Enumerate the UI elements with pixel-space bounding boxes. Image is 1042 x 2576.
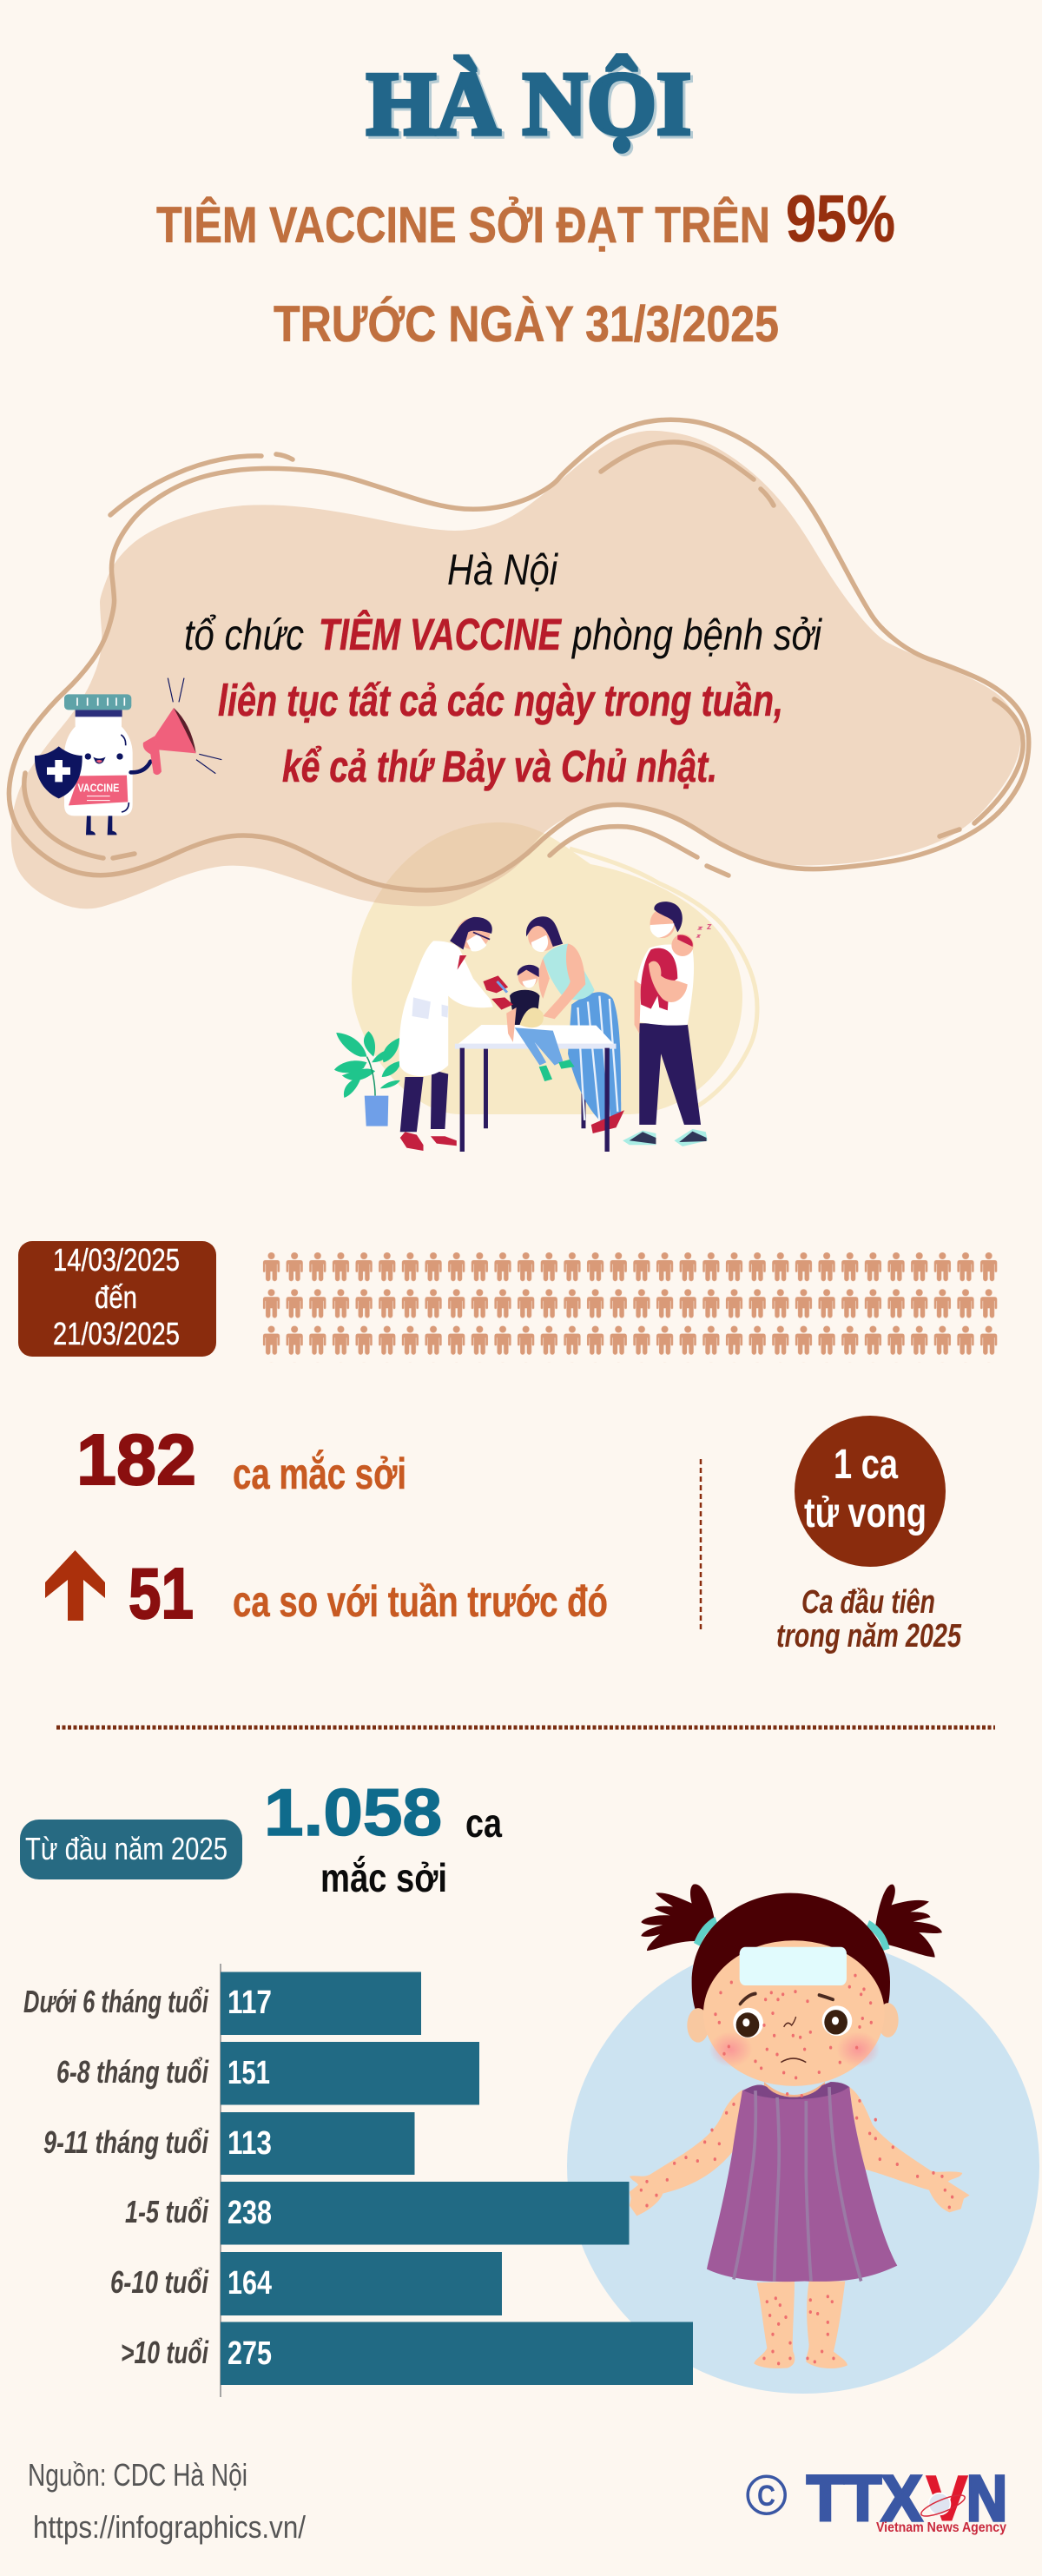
stat: 1.058 cases: 1.058 [264,1776,442,1850]
logo: TTXVN: TTX [807,2462,922,2534]
bar: over 10 years: 275 [228,2335,272,2372]
callout: 1 death [795,1416,946,1567]
logo: TTXVN: C [757,2480,775,2513]
logo: TTXVN [748,2462,1007,2535]
bar: 1-5 years: 1-5 tuổi [125,2194,209,2229]
yellow backdrop behind family [352,822,757,1114]
stat: 51 more cases [129,1553,608,1634]
subtitle [156,182,895,353]
stat: 182 cases: 182 [76,1419,196,1500]
title: HÀ NỘI [366,54,691,154]
stat: 182 cases: ca mắc sởi [233,1450,406,1498]
stat: 51 more cases: 51 [129,1553,194,1634]
logo: TTXVN: Vietnam News Agency [876,2520,1006,2535]
table [455,1025,616,1152]
caption: first death: trong năm 2025 [776,1618,962,1655]
caption: first death: Ca đầu tiên [801,1584,935,1621]
bar: under 6 months [23,1972,421,2035]
source text: https://infographics.vn/ [33,2509,306,2545]
bar: 6-10 years: 164 [228,2265,272,2302]
bar: 6-10 years: 6-10 tuổi [110,2264,209,2300]
text block: message [184,545,823,791]
bar: 6-8 months: 151 [228,2055,270,2091]
subtitle: TIÊM VACCINE SỞI ĐẠT TRÊN [156,197,770,254]
source text: Nguồn: CDC Hà Nội [28,2457,247,2493]
bar: under 6 months: 117 [228,1985,272,2021]
stat: 1.058 cases: mắc sởi [320,1855,447,1900]
panel: message blob [7,417,1032,908]
title: HÀ NỘI [369,56,694,156]
illustration: family at vaccination [334,902,711,1152]
date badge: 21/03/2025 [53,1316,180,1351]
subtitle: TRƯỚC NGÀY 31/3/2025 [274,296,779,353]
icon array: people pictogram rows [260,1252,1000,1363]
logo: TTXVN: N [966,2462,1007,2534]
backdrop circle behind child [567,1939,1039,2394]
bar: 9-11 months [43,2112,415,2175]
stat: 1.058 cases [264,1776,502,1900]
text block: message: Hà Nội [447,545,559,594]
bar: 6-8 months [56,2042,479,2105]
bar: over 10 years [121,2322,693,2385]
icon: potted plant [334,1031,400,1126]
text block: message: kể cả thứ Bảy và Chủ nhật. [282,742,717,791]
bar: over 10 years: >10 tuổi [121,2335,209,2370]
bar: 1-5 years: 238 [228,2195,272,2231]
date badge: đến [95,1279,137,1315]
source text [28,2457,306,2545]
bar: 1-5 years [125,2182,629,2244]
pill: since start of 2025: Từ đầu năm 2025 [25,1831,228,1866]
father holding baby [623,902,711,1146]
bar: 6-10 years [110,2252,502,2315]
text block: message: phòng bệnh sởi [570,611,823,659]
stat: 51 more cases: ca so với tuần trước đó [233,1577,608,1626]
date badge [18,1241,216,1357]
arrow: increase [45,1550,105,1621]
icon: vaccine bottle with megaphone: VACCINE [77,783,119,795]
text block: message: TIÊM VACCINE [319,609,563,659]
callout: 1 death: tử vong [804,1490,927,1536]
mother [526,916,624,1133]
stat: 182 cases [76,1419,406,1500]
text block: message: tổ chức [184,611,304,659]
logo: TTXVN: V [926,2462,968,2534]
pill: since start of 2025 [20,1820,242,1879]
callout: 1 death: 1 ca [834,1442,898,1488]
stat: 1.058 cases: ca [465,1800,502,1846]
bar chart: cases by age group [23,1964,693,2397]
bar: 9-11 months: 9-11 tháng tuổi [43,2124,209,2160]
bar: 6-8 months: 6-8 tháng tuổi [56,2054,209,2090]
subtitle: 95% [786,182,895,256]
icon: vaccine bottle with megaphone [35,678,221,835]
caption: first death [776,1584,962,1655]
bar: 9-11 months: 113 [228,2125,272,2162]
table back legs [485,1048,584,1128]
doctor [399,917,513,1151]
illustration: child with measles rash [630,1884,970,2368]
bar: under 6 months: Dưới 6 tháng tuổi [23,1984,209,2019]
date badge: 14/03/2025 [53,1242,180,1278]
text block: message: liên tục tất cả các ngày trong tuần, [218,676,783,725]
child patient [506,965,575,1081]
